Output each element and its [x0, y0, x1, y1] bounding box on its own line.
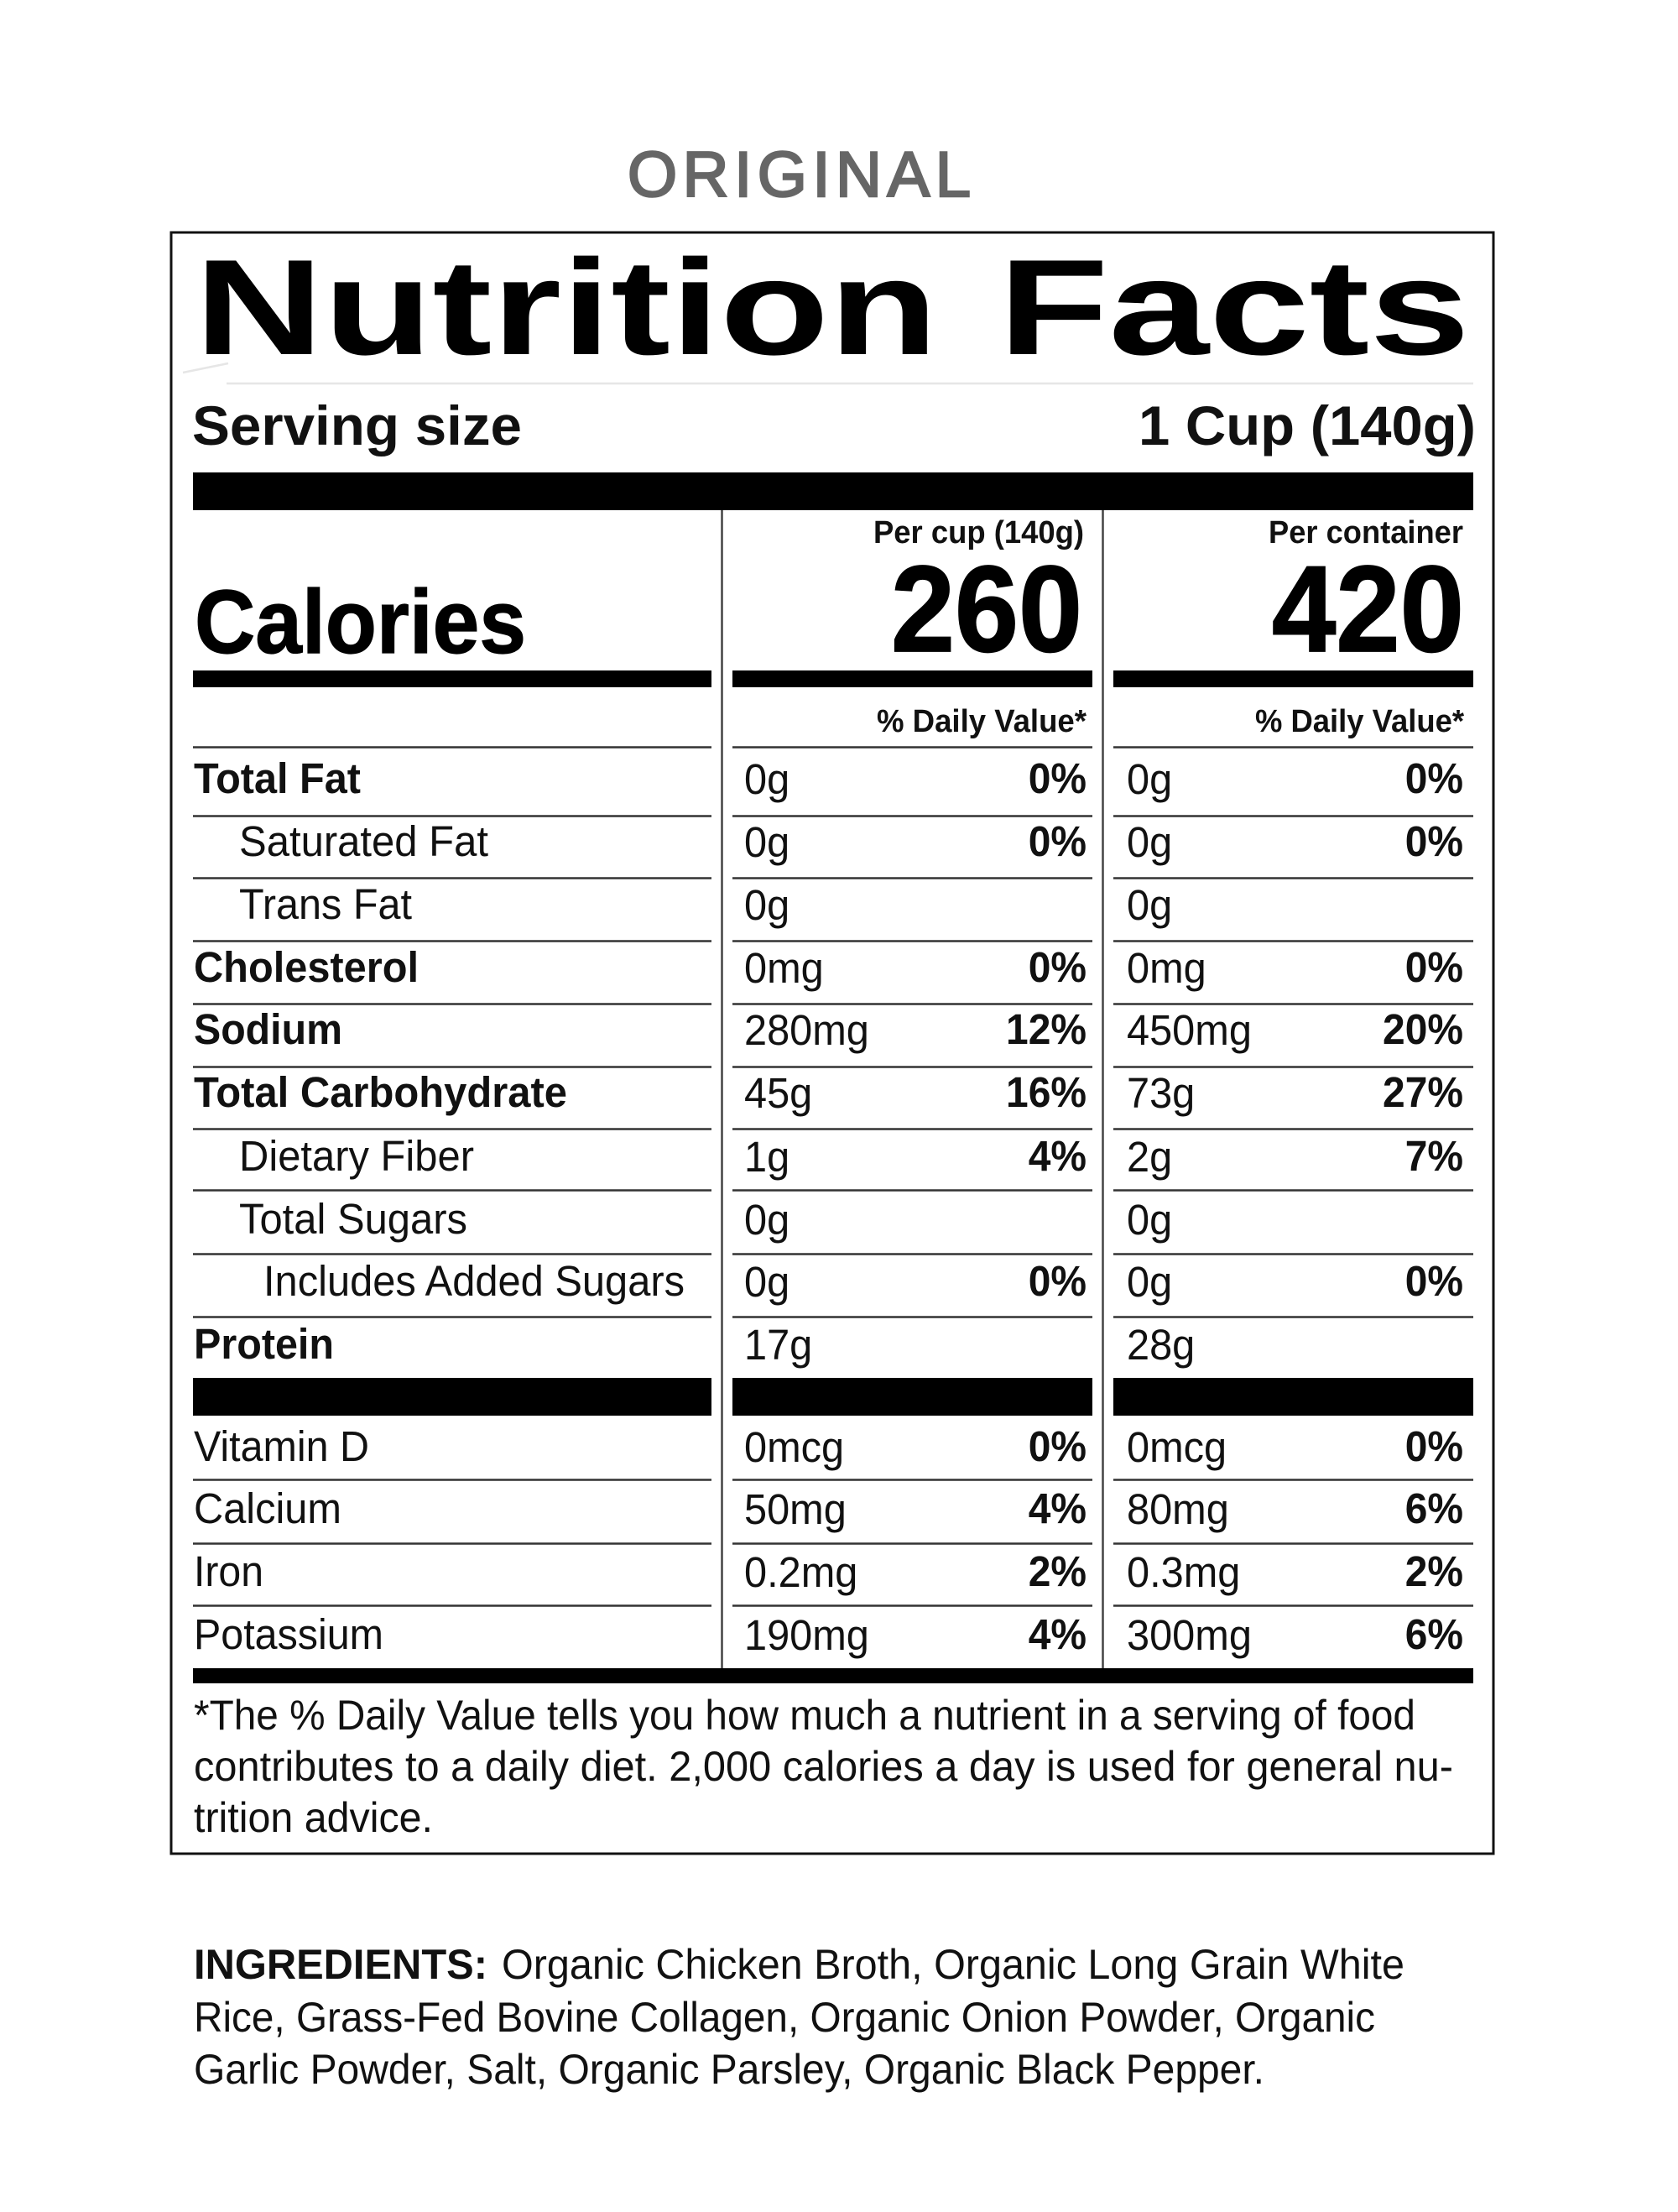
row: total carbohydrate: 45g — [744, 1069, 812, 1117]
row: protein — [194, 1320, 1195, 1369]
row: total carbohydrate — [194, 1068, 1463, 1117]
footnote — [194, 1692, 1453, 1841]
row: cholesterol: 0% — [1405, 944, 1463, 991]
row: calcium: 4% — [1029, 1485, 1087, 1532]
calories per container: 420 — [1272, 540, 1464, 677]
footnote: *The % Daily Value tells you how much a nutrient in a serving of food — [194, 1692, 1415, 1739]
column dividers — [722, 510, 1102, 1668]
title: Nutrition Facts: Nutrition — [195, 232, 938, 383]
row: includes added sugars: 0g — [1127, 1258, 1172, 1306]
row: saturated fat: 0g — [744, 818, 789, 866]
row: includes added sugars — [263, 1257, 1463, 1306]
row: vitamin d — [194, 1422, 1463, 1471]
row: total sugars: 0g — [1127, 1196, 1172, 1244]
row: cholesterol: 0mg — [1127, 944, 1206, 992]
row rules — [193, 747, 1473, 1606]
heading: ORIGINAL: ORIGINAL — [628, 139, 971, 211]
row: sodium: 20% — [1383, 1006, 1463, 1053]
row: vitamin d: 0% — [1029, 1423, 1087, 1470]
row: vitamin d: Vitamin D — [194, 1422, 369, 1470]
row: includes added sugars: 0% — [1405, 1258, 1463, 1305]
thick divider — [193, 472, 1473, 510]
row: iron: 2% — [1029, 1548, 1087, 1595]
row: potassium: 6% — [1405, 1611, 1463, 1658]
row: cholesterol: Cholesterol — [194, 943, 419, 991]
row: dietary fiber: 7% — [1405, 1133, 1463, 1180]
row: dietary fiber — [239, 1132, 1463, 1181]
row: total sugars — [239, 1195, 1172, 1244]
row: saturated fat: 0g — [1127, 818, 1172, 866]
panel border — [171, 232, 1493, 1854]
row: dietary fiber: 2g — [1127, 1133, 1172, 1181]
row: sodium: Sodium — [194, 1005, 342, 1053]
row: sodium — [194, 1005, 1463, 1054]
panel: nutrition facts label — [171, 232, 1493, 1854]
daily value heading col 2: % Daily Value* — [1255, 704, 1464, 739]
row: cholesterol — [194, 943, 1463, 992]
row: cholesterol: 0mg — [744, 944, 824, 992]
row: trans fat — [239, 880, 1172, 929]
row: total fat: Total Fat — [194, 754, 361, 802]
serving size label: Serving size — [192, 394, 522, 456]
row: calcium: 6% — [1405, 1485, 1463, 1532]
calories label: Calories — [195, 571, 526, 672]
title: Nutrition Facts — [195, 232, 1470, 383]
row: calcium: Calcium — [194, 1484, 341, 1532]
row: iron: 0.2mg — [744, 1548, 857, 1596]
row: total fat — [194, 754, 1463, 803]
row: includes added sugars: 0% — [1029, 1258, 1087, 1305]
row: calcium: 50mg — [744, 1485, 847, 1533]
row: total sugars: Total Sugars — [239, 1195, 467, 1243]
bottom divider — [193, 1668, 1473, 1683]
row: potassium: Potassium — [194, 1610, 383, 1658]
row: protein: 28g — [1127, 1321, 1195, 1369]
row: calcium: 80mg — [1127, 1485, 1229, 1533]
row: cholesterol: 0% — [1029, 944, 1087, 991]
footnote: contributes to a daily diet. 2,000 calories a day is used for general nu- — [194, 1743, 1453, 1790]
row: total fat: 0g — [1127, 755, 1172, 803]
footnote: trition advice. — [194, 1794, 433, 1841]
row: iron: Iron — [194, 1547, 263, 1595]
row: total carbohydrate: Total Carbohydrate — [194, 1068, 567, 1116]
row: potassium: 4% — [1029, 1611, 1087, 1658]
row: iron — [194, 1547, 1463, 1596]
row: total fat: 0% — [1029, 755, 1087, 802]
ingredients: Rice, Grass-Fed Bovine Collagen, Organic Onion Powder, Organic — [194, 1994, 1375, 2041]
row: saturated fat — [239, 817, 1463, 866]
row: potassium: 300mg — [1127, 1611, 1252, 1659]
row: total sugars: 0g — [744, 1196, 789, 1244]
row: trans fat: 0g — [744, 881, 789, 929]
ingredients: INGREDIENTS: — [194, 1941, 487, 1988]
row: dietary fiber: Dietary Fiber — [239, 1132, 474, 1180]
thick dividers — [193, 1378, 1473, 1416]
row: total carbohydrate: 27% — [1383, 1069, 1463, 1116]
calories per cup: 260 — [891, 540, 1082, 677]
row: saturated fat: 0% — [1405, 818, 1463, 865]
row: sodium: 280mg — [744, 1006, 869, 1054]
per cup heading: Per cup (140g) — [873, 515, 1084, 550]
ingredients: Organic Chicken Broth, Organic Long Grain White — [502, 1941, 1404, 1988]
daily value heading col 1: % Daily Value* — [877, 704, 1087, 739]
row: includes added sugars: 0g — [744, 1258, 789, 1306]
row: trans fat: 0g — [1127, 881, 1172, 929]
calories dividers — [193, 670, 1473, 687]
row: protein: 17g — [744, 1321, 812, 1369]
row: dietary fiber: 1g — [744, 1133, 789, 1181]
row: vitamin d: 0% — [1405, 1423, 1463, 1470]
row: calcium — [194, 1484, 1463, 1533]
per container heading: Per container — [1269, 515, 1463, 550]
row: sodium: 12% — [1006, 1006, 1087, 1053]
row: trans fat: Trans Fat — [239, 880, 412, 928]
row: saturated fat: Saturated Fat — [239, 817, 488, 865]
row: protein: Protein — [194, 1320, 334, 1368]
ingredients — [194, 1941, 1404, 2093]
row: total carbohydrate: 73g — [1127, 1069, 1195, 1117]
row: potassium: 190mg — [744, 1611, 869, 1659]
row: dietary fiber: 4% — [1029, 1133, 1087, 1180]
row: vitamin d: 0mcg — [1127, 1423, 1227, 1471]
row: vitamin d: 0mcg — [744, 1423, 844, 1471]
row: includes added sugars: Includes Added Sugars — [263, 1257, 685, 1305]
row: iron: 0.3mg — [1127, 1548, 1240, 1596]
row: potassium — [194, 1610, 1463, 1659]
row: total fat: 0g — [744, 755, 789, 803]
ingredients: Garlic Powder, Salt, Organic Parsley, Organic Black Pepper. — [194, 2046, 1264, 2093]
row: sodium: 450mg — [1127, 1006, 1252, 1054]
row: total fat: 0% — [1405, 755, 1463, 802]
row: iron: 2% — [1405, 1548, 1463, 1595]
row: saturated fat: 0% — [1029, 818, 1087, 865]
serving size value: 1 Cup (140g) — [1139, 394, 1476, 456]
row: total carbohydrate: 16% — [1006, 1069, 1087, 1116]
title: Nutrition Facts: Facts — [998, 232, 1470, 383]
